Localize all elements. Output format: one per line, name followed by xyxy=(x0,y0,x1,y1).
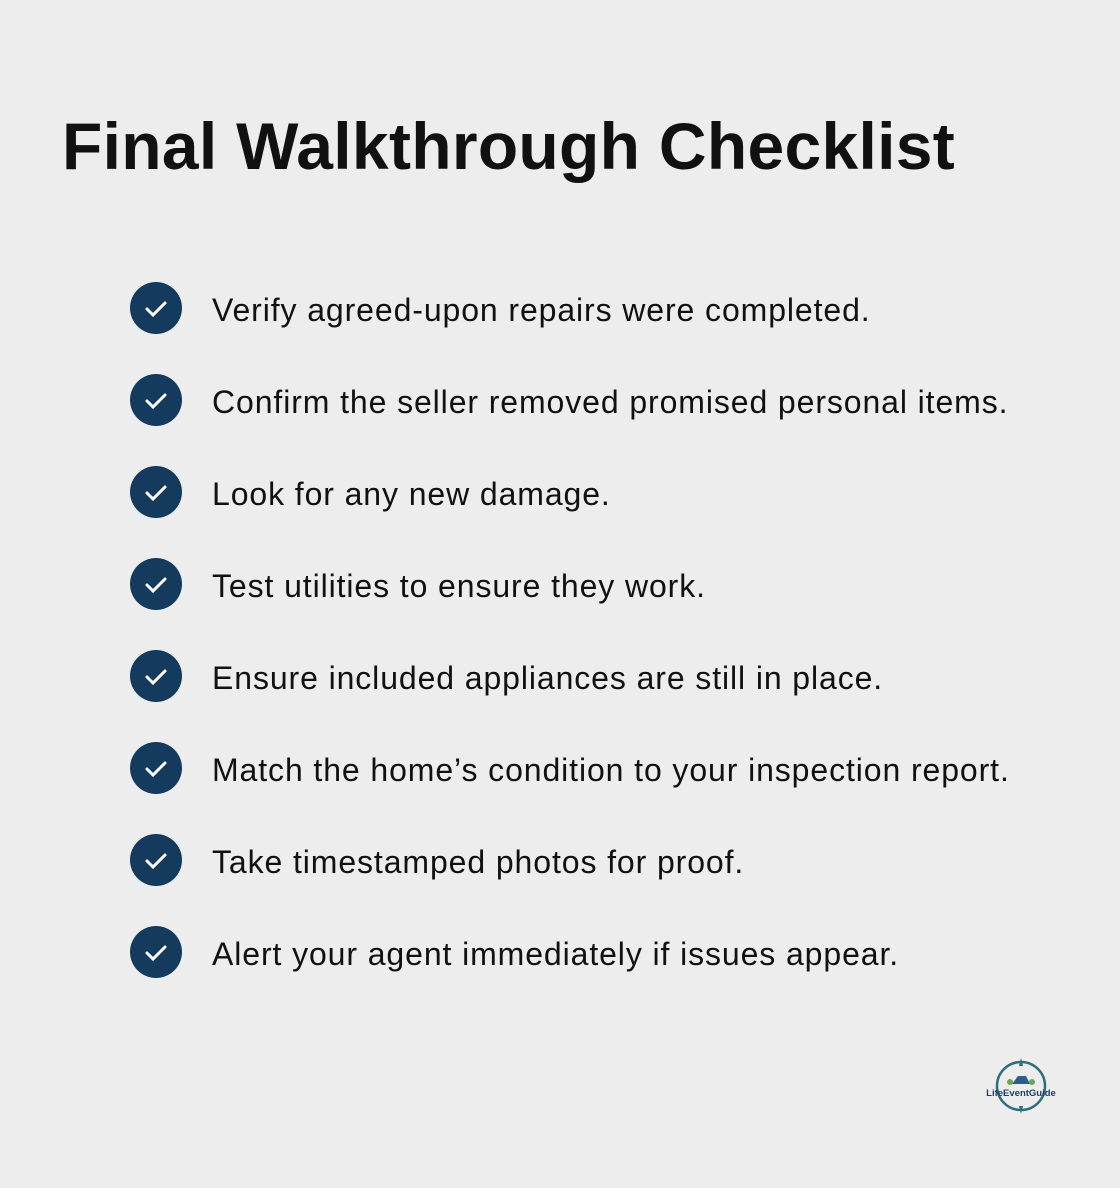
item 4 xyxy=(130,558,706,610)
logo: LifeEventGuide xyxy=(986,1088,1056,1099)
item 6: Match the home’s condition to your inspection report. xyxy=(212,752,1010,788)
logo xyxy=(986,1058,1056,1114)
item 3 xyxy=(130,466,611,518)
item 2 xyxy=(130,374,1008,426)
item 6 xyxy=(130,742,1010,794)
item 5 xyxy=(130,650,883,702)
item 5: Ensure included appliances are still in place. xyxy=(212,660,883,696)
title: Final Walkthrough Checklist xyxy=(62,109,955,183)
item 2: Confirm the seller removed promised personal items. xyxy=(212,384,1008,420)
item 1 xyxy=(130,282,871,334)
item 8: Alert your agent immediately if issues appear. xyxy=(212,936,899,972)
item 7: Take timestamped photos for proof. xyxy=(212,844,744,880)
item 7 xyxy=(130,834,744,886)
item 1: Verify agreed-upon repairs were completed. xyxy=(212,292,871,328)
item 4: Test utilities to ensure they work. xyxy=(212,568,706,604)
item 3: Look for any new damage. xyxy=(212,476,611,512)
item 8 xyxy=(130,926,899,978)
